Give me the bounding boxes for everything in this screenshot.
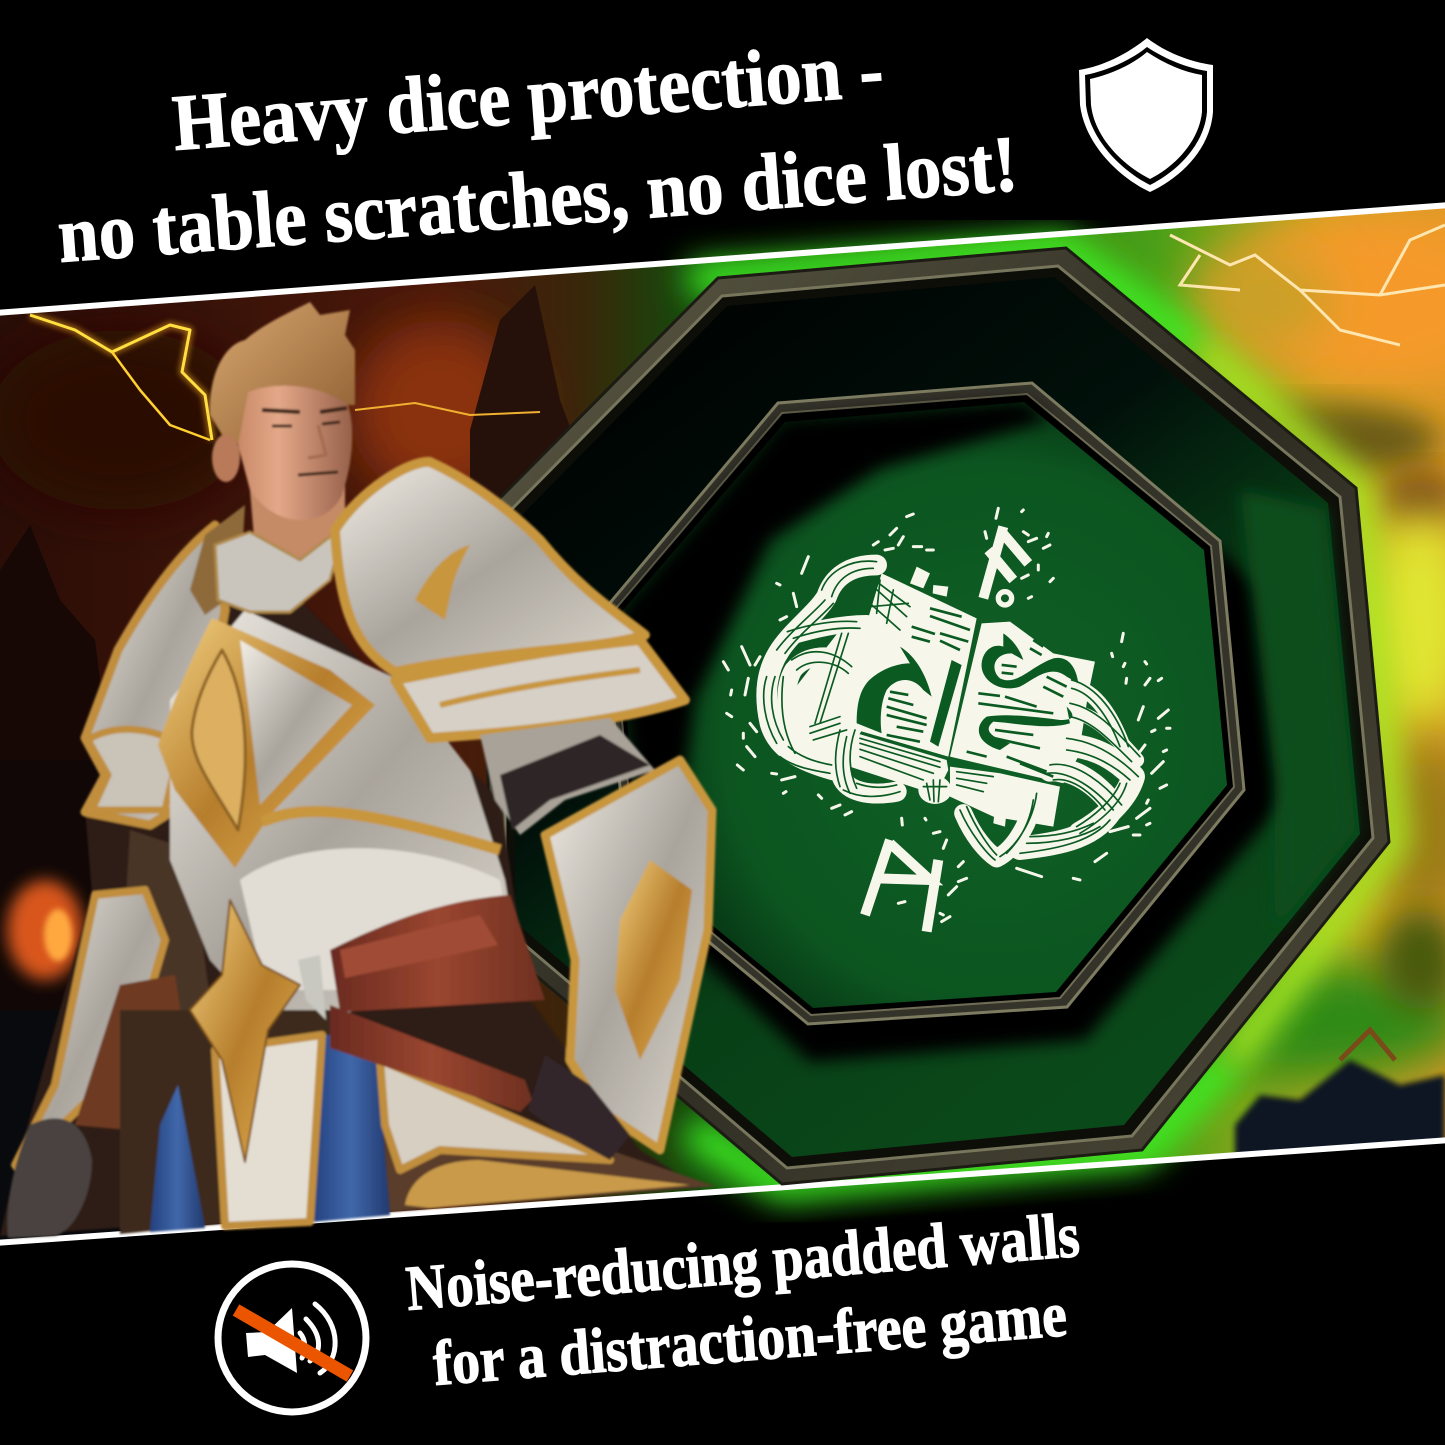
heading line 2: no table scratches, no dice lost!: [55, 120, 1021, 280]
face: [238, 386, 352, 520]
belt red: [330, 895, 545, 1012]
head hair: [210, 302, 355, 445]
caption line 1: Noise-reducing padded walls: [403, 1199, 1082, 1324]
fire glow: [7, 880, 83, 980]
emblem: open book with flames: [723, 508, 1170, 932]
icon: shield: [1079, 38, 1213, 192]
panel: knight illustration: [0, 302, 715, 1238]
dice tray: [488, 248, 1389, 1184]
highlight felt right: [1240, 490, 1355, 930]
inner wall gap: [612, 394, 1234, 1015]
dragon left: [857, 647, 932, 733]
sword hilt: [190, 900, 300, 1162]
right pauldron: [335, 462, 645, 672]
ear: [212, 434, 240, 482]
felt shadow top-left: [618, 400, 1050, 890]
glow: green halo bottom of tray: [690, 1060, 1230, 1185]
dragon right: [979, 633, 1078, 750]
collar dark back: [190, 505, 245, 615]
belly highlight: [240, 848, 510, 990]
panel: fantasy scene band: [0, 190, 1445, 1250]
neck: [250, 480, 345, 570]
skirt base: [120, 1010, 560, 1234]
right gauntlet: [528, 1055, 630, 1160]
shadow under inner wall: [640, 545, 1285, 1062]
glow: green halo top of tray: [690, 250, 1200, 350]
eyes and mouth: [262, 408, 347, 475]
blue cloth left: [150, 1085, 205, 1232]
panel: black strip over top glow: [0, 0, 1445, 290]
lower plate white: [215, 1035, 322, 1226]
collar: [215, 525, 345, 612]
gold sash line: [262, 812, 500, 850]
pauldron gold emblem: [415, 545, 470, 620]
bookmarks: [910, 567, 1008, 827]
flame inner lines: [764, 561, 1140, 860]
inner felt floor: [618, 402, 1227, 1008]
lightning left: [30, 315, 540, 440]
left forearm plate: [15, 890, 165, 1185]
rune top: [983, 527, 1028, 605]
divider: bottom white line: [0, 1140, 1445, 1243]
elbow band dark: [500, 735, 650, 830]
left gauntlet: [7, 1118, 92, 1238]
lower plate gold lines: [440, 670, 640, 705]
right page: [950, 622, 1095, 783]
rune bottom: [865, 840, 938, 932]
heading line 1: Heavy dice protection -: [170, 26, 886, 168]
caption line 2: for a distraction-free game: [431, 1278, 1069, 1399]
flames white base: [767, 565, 1137, 858]
left shoulder gold layer: [88, 729, 180, 810]
torso armor: [170, 610, 518, 1015]
divider: top white line: [0, 205, 1445, 313]
knight dark underlay: [0, 560, 700, 1236]
upper arm: [480, 718, 655, 835]
right pauldron lower plate: [395, 640, 685, 738]
book edges: [788, 730, 948, 792]
tray outer rim: [488, 248, 1389, 1184]
lower right gold curl: [405, 1160, 690, 1208]
left page: [788, 573, 977, 757]
glow: yellow-green halo right of tray: [1200, 350, 1392, 1060]
sword guard: [298, 955, 326, 1020]
spine: [918, 776, 952, 804]
vambrace gold flame: [615, 860, 692, 1060]
left forearm brown: [75, 975, 185, 1130]
chest silver inset: [240, 640, 352, 805]
tray outer felt: [515, 277, 1360, 1157]
tray outer rim highlight: [505, 266, 1373, 1168]
lower right plate silver: [380, 1060, 610, 1170]
left shoulder plate: [85, 525, 225, 825]
blue cloth centre: [312, 1035, 390, 1222]
panel: black strip over bottom glow: [0, 1180, 1445, 1445]
icon: muted speaker: [218, 1264, 366, 1412]
page tag: [930, 660, 962, 747]
lower right skirt plate: [378, 1060, 715, 1212]
sparks: [723, 508, 1170, 922]
left upper arm: [120, 830, 210, 1050]
chest gold plate: [158, 618, 375, 868]
page text: [887, 608, 1067, 777]
lightning right: [1170, 225, 1445, 345]
vambrace: [545, 760, 712, 1150]
chest emblem: [192, 650, 245, 830]
belt highlight: [340, 915, 498, 978]
belt red strap: [330, 1005, 532, 1112]
dark mountains: [0, 285, 575, 1240]
inner wall rim: [604, 383, 1244, 1024]
